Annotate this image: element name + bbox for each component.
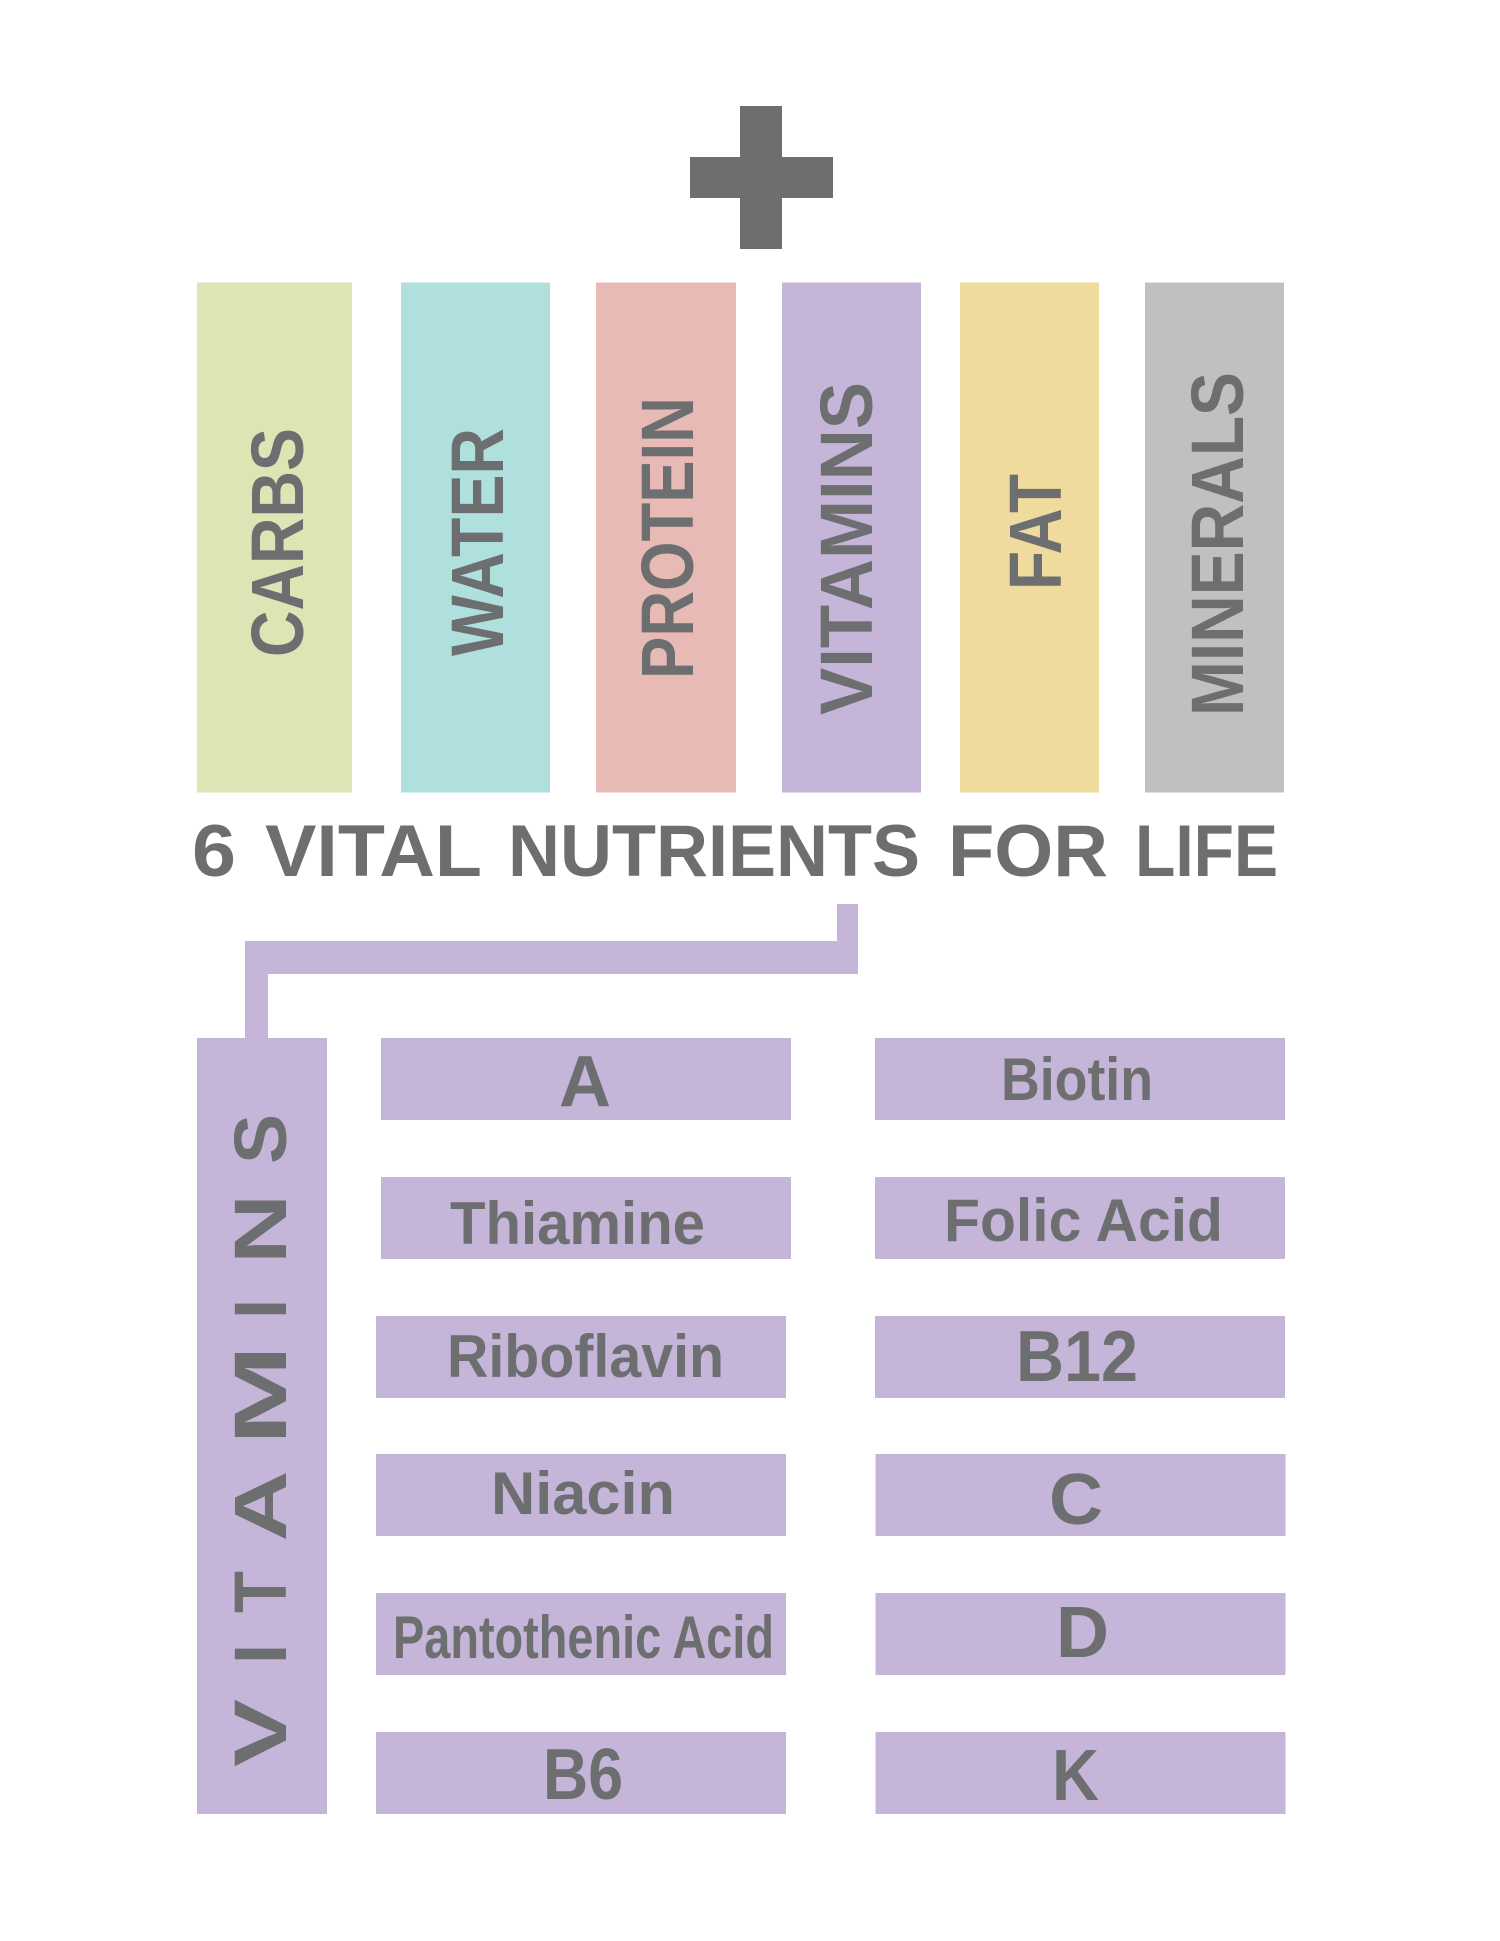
bar: carbs <box>197 282 352 792</box>
panel: vitamins side label: I <box>219 1299 302 1319</box>
item: Riboflavin <box>376 1316 786 1398</box>
item: Biotin <box>875 1038 1285 1120</box>
item: Pantothenic Acid <box>376 1593 786 1675</box>
item: Niacin <box>376 1454 786 1536</box>
title: LIFE <box>1135 811 1278 892</box>
item: Pantothenic Acid: Pantothenic Acid <box>393 1604 774 1671</box>
item: K <box>876 1732 1286 1816</box>
bar: protein: PROTEIN <box>626 397 709 679</box>
item: B12: B12 <box>1016 1317 1138 1397</box>
item: Folic Acid <box>875 1177 1285 1259</box>
item: D <box>876 1593 1286 1675</box>
item: B6 <box>376 1732 786 1815</box>
item: A <box>381 1038 791 1122</box>
bar: carbs: CARBS <box>236 428 319 657</box>
panel: vitamins side label <box>197 1038 327 1814</box>
icon: plus sign <box>690 106 833 249</box>
bar: minerals: MINERALS <box>1176 372 1259 716</box>
title: 6 <box>192 811 236 892</box>
connector: vitamins bar to vitamins panel <box>245 904 858 1040</box>
panel: vitamins side label: M <box>219 1345 302 1445</box>
bar: water: WATER <box>436 428 519 656</box>
item: Riboflavin: Riboflavin <box>447 1323 724 1390</box>
bar: fat: FAT <box>994 474 1077 590</box>
item: Folic Acid: Folic Acid <box>944 1187 1223 1254</box>
bar: vitamins <box>782 282 921 792</box>
bar: minerals <box>1145 282 1284 792</box>
bar: vitamins: VITAMINS <box>805 382 888 715</box>
item: Niacin: Niacin <box>491 1460 675 1527</box>
panel: vitamins side label: T <box>219 1571 302 1613</box>
item: D: D <box>1056 1593 1109 1673</box>
title <box>192 811 1278 892</box>
panel: vitamins side label: S <box>219 1114 302 1164</box>
panel: vitamins side label: N <box>219 1194 302 1264</box>
item: B6: B6 <box>543 1735 623 1815</box>
panel: vitamins side label: I <box>219 1644 302 1664</box>
title: VITAL <box>265 811 482 892</box>
title: NUTRIENTS <box>508 811 920 892</box>
item: B12 <box>875 1316 1285 1398</box>
item: C <box>876 1454 1286 1540</box>
item: Biotin: Biotin <box>1001 1046 1153 1113</box>
bar: protein <box>596 282 736 792</box>
panel: vitamin list <box>376 1038 1286 1816</box>
panel: vitamins side label: V <box>219 1699 302 1767</box>
item: C: C <box>1049 1460 1103 1540</box>
panel: vitamins side label: A <box>219 1470 302 1542</box>
panel: six nutrient bars <box>197 282 1284 792</box>
bar: water <box>401 282 550 792</box>
title: FOR <box>948 811 1108 892</box>
bar: fat <box>960 282 1099 792</box>
item: A: A <box>559 1042 611 1122</box>
item: K: K <box>1052 1736 1099 1816</box>
item: Thiamine <box>381 1177 791 1259</box>
item: Thiamine: Thiamine <box>450 1190 705 1257</box>
